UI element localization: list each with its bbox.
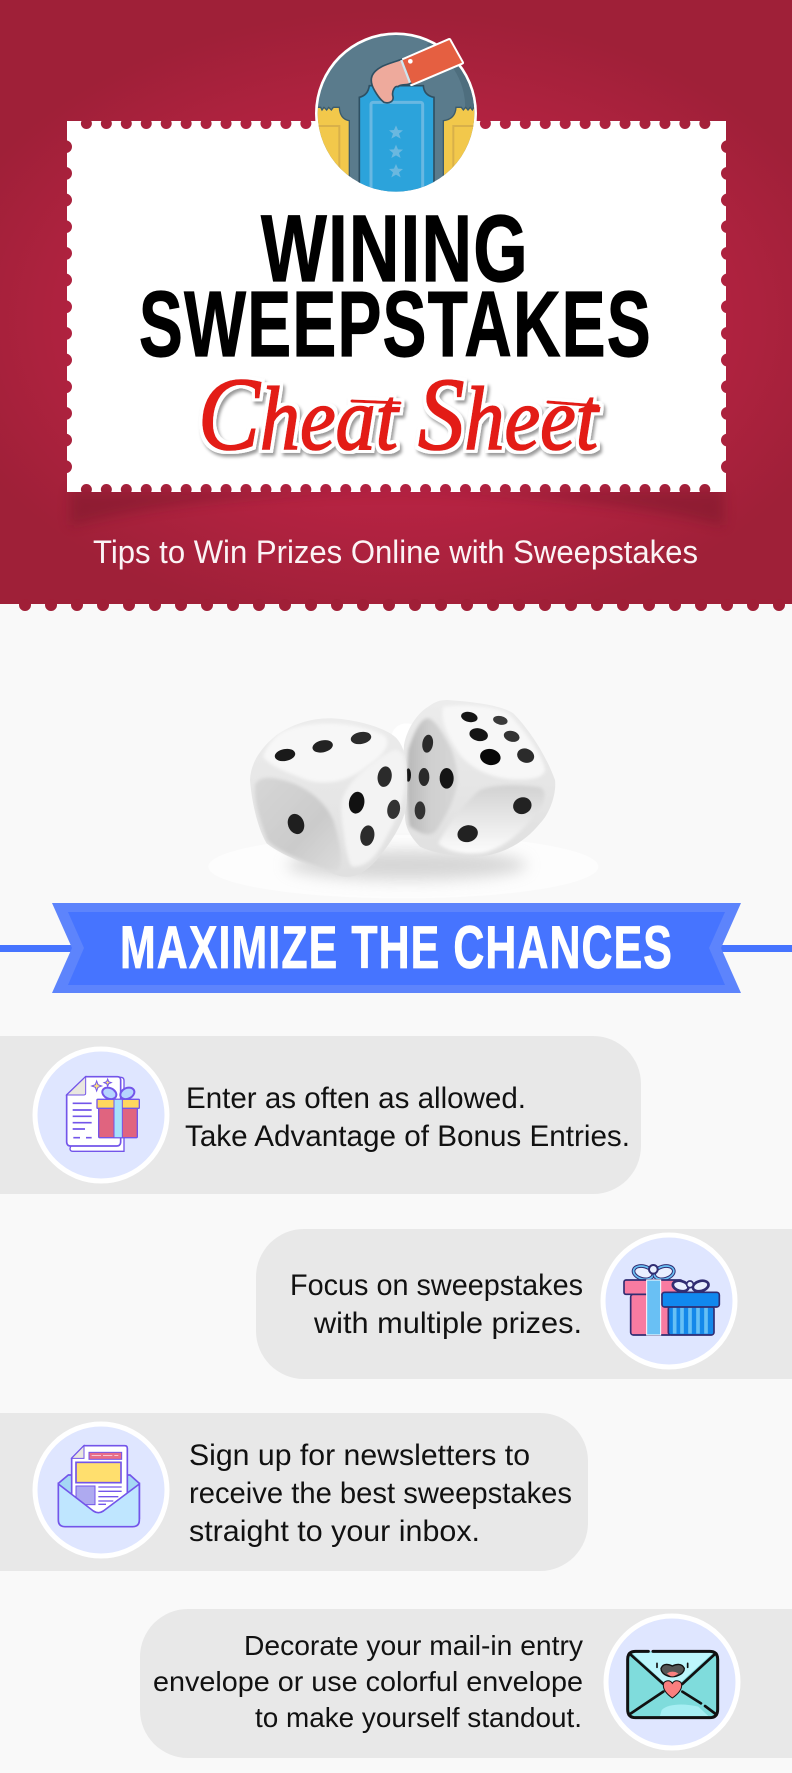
tip 3 text: Sign up for newsletters to bbox=[189, 1439, 530, 1472]
subtitle: Tips to Win Prizes Online with Sweepstakes bbox=[93, 534, 698, 570]
tip 4 panel bbox=[140, 1609, 792, 1758]
tip 4 text: Decorate your mail-in entry bbox=[244, 1630, 583, 1661]
tip 3 panel bbox=[0, 1413, 588, 1571]
tip 3 text: straight to your inbox. bbox=[189, 1515, 480, 1548]
header background with scalloped bottom edge bbox=[0, 0, 792, 605]
tip 4 text: to make yourself standout. bbox=[255, 1702, 582, 1733]
tip 3 text bbox=[189, 1439, 572, 1548]
tip 2 text: with multiple prizes. bbox=[313, 1307, 582, 1340]
header panel bbox=[0, 0, 792, 605]
tip 2 text: Focus on sweepstakes bbox=[290, 1269, 583, 1302]
title: Wining Sweepstakes: WINING bbox=[261, 196, 529, 302]
icon: love envelope bbox=[606, 1616, 738, 1748]
icon: hand pulling ticket bbox=[313, 30, 480, 202]
tip 1 text: Enter as often as allowed. bbox=[186, 1082, 526, 1115]
icon: newsletter in envelope bbox=[35, 1424, 167, 1556]
tip 1 text: Take Advantage of Bonus Entries. bbox=[185, 1120, 630, 1153]
title script: Cheat Sheet: Cheat Sheet bbox=[198, 357, 600, 472]
tip 4 text: envelope or use colorful envelope bbox=[153, 1666, 583, 1697]
illustration: two dice bbox=[208, 700, 598, 898]
coupon shadow bbox=[70, 490, 724, 526]
tip 3 text: receive the best sweepstakes bbox=[189, 1477, 572, 1510]
tip 2 text bbox=[290, 1269, 583, 1340]
icon: document and gift bbox=[35, 1049, 167, 1181]
right die bbox=[403, 700, 555, 857]
white coupon card bbox=[67, 121, 726, 492]
icon: gift boxes bbox=[603, 1235, 735, 1367]
section banner: Maximize the Chances bbox=[0, 903, 792, 993]
tip 1 panel bbox=[0, 1036, 641, 1194]
tip 1 text bbox=[185, 1082, 630, 1153]
tip 2 panel bbox=[256, 1229, 792, 1379]
title: Wining Sweepstakes bbox=[139, 196, 652, 376]
left die bbox=[250, 718, 407, 877]
tip 4 text bbox=[153, 1630, 583, 1733]
